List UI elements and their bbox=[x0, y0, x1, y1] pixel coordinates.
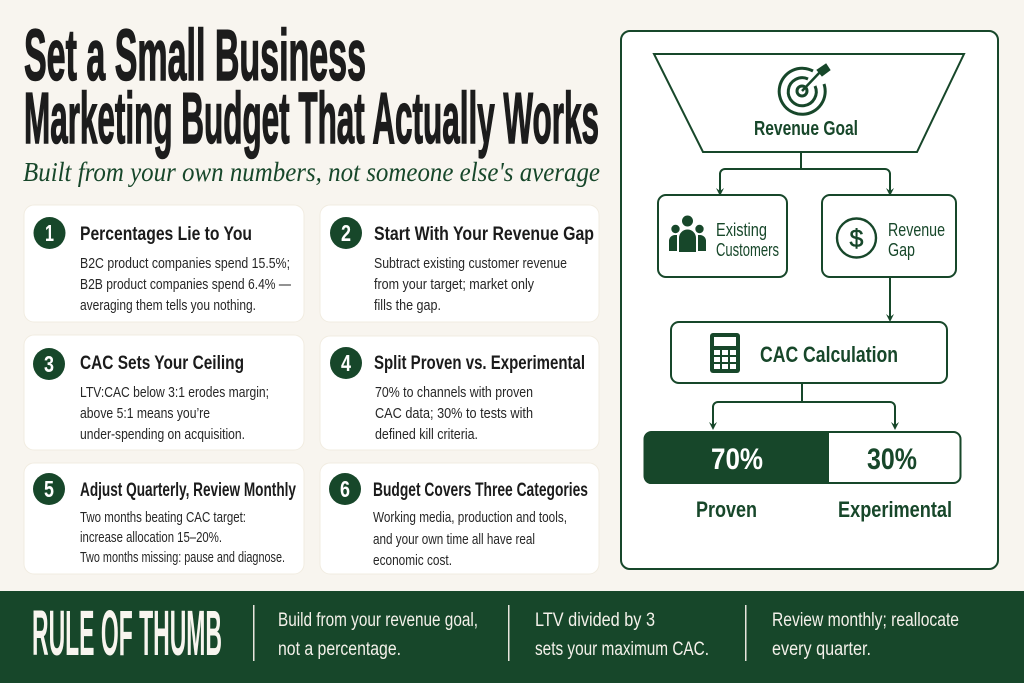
bar: 70/30 split bbox=[644, 432, 960, 484]
panel: card 6: 6 bbox=[340, 476, 350, 502]
panel: flow diagram bbox=[621, 31, 998, 569]
panel: card 6: Working media, production and tools, bbox=[373, 510, 567, 526]
panel: card 3: under-spending on acquisition. bbox=[80, 427, 245, 443]
panel: card 2: 2 bbox=[341, 220, 351, 246]
panel: card 6 bbox=[320, 463, 599, 574]
panel: card 2: from your target; market only bbox=[374, 277, 535, 293]
panel: card 4: 70% to channels with proven bbox=[375, 385, 533, 401]
text: tip 3 bbox=[772, 610, 959, 660]
panel: card 1: B2B product companies spend 6.4% — bbox=[80, 277, 291, 293]
text: tip 3: Review monthly; reallocate bbox=[772, 610, 959, 631]
panel: card 1: 1 bbox=[45, 220, 54, 246]
panel: card 5: 5 bbox=[44, 476, 54, 502]
bar: 70/30 split: 70% bbox=[711, 443, 763, 476]
bar: 70/30 split: 30% bbox=[867, 443, 917, 476]
panel: card 6: economic cost. bbox=[373, 553, 452, 569]
text: tip 2 bbox=[535, 610, 709, 660]
box: CAC calculation bbox=[671, 322, 947, 383]
panel: card 1 bbox=[24, 205, 304, 322]
panel: card 1: B2C product companies spend 15.5%; bbox=[80, 256, 290, 272]
panel: card 5 bbox=[24, 463, 304, 574]
box: existing customers: Customers bbox=[716, 240, 779, 260]
box: revenue gap bbox=[822, 195, 956, 277]
text: tip 1: not a percentage. bbox=[278, 639, 401, 660]
panel: card 4: defined kill criteria. bbox=[375, 427, 478, 443]
panel: card 2: Start With Your Revenue Gap bbox=[374, 224, 594, 245]
text: tip 1: Build from your revenue goal, bbox=[278, 610, 478, 631]
box: CAC calculation: CAC Calculation bbox=[760, 342, 898, 367]
panel: card 3: above 5:1 means you’re bbox=[80, 406, 210, 422]
panel: card 5: Adjust Quarterly, Review Monthly bbox=[80, 480, 296, 501]
panel: card 6: and your own time all have real bbox=[373, 532, 535, 548]
panel: rule of thumb banner: RULE OF THUMB bbox=[32, 597, 222, 669]
panel: card 3: LTV:CAC below 3:1 erodes margin; bbox=[80, 385, 269, 401]
panel: card 4: 4 bbox=[341, 350, 351, 376]
text: tip 1 bbox=[278, 610, 478, 660]
panel: card 5: Two months beating CAC target: bbox=[80, 510, 246, 526]
panel: card 2 bbox=[320, 205, 599, 322]
panel: card 2: fills the gap. bbox=[374, 298, 441, 314]
arrow: gap to CAC bbox=[886, 277, 894, 322]
panel: card 1: averaging them tells you nothing. bbox=[80, 298, 256, 314]
text: tip 3: every quarter. bbox=[772, 639, 871, 660]
box: existing customers: Existing bbox=[716, 220, 767, 240]
panel: card 4 bbox=[320, 336, 599, 450]
panel: card 4: CAC data; 30% to tests with bbox=[375, 406, 533, 422]
icon: target bbox=[779, 64, 830, 114]
arrow: CAC to split bbox=[709, 383, 899, 430]
icon: calculator bbox=[710, 333, 740, 373]
box: revenue gap: Gap bbox=[888, 240, 915, 260]
panel: card 5: increase allocation 15–20%. bbox=[80, 530, 222, 546]
panel: card 3: 3 bbox=[44, 351, 54, 377]
text: tip 2: LTV divided by 3 bbox=[535, 610, 655, 631]
subtitle: Built from your own numbers, not someone else's average bbox=[23, 157, 600, 187]
funnel: revenue goal: Revenue Goal bbox=[754, 118, 858, 140]
panel: card 3 bbox=[24, 335, 304, 450]
text: tip 2: sets your maximum CAC. bbox=[535, 639, 709, 660]
label: proven: Proven bbox=[696, 497, 757, 522]
label: experimental: Experimental bbox=[838, 497, 952, 522]
title: Set a Small Business bbox=[24, 16, 366, 96]
box: existing customers bbox=[658, 195, 787, 277]
arrow: goal to two boxes bbox=[716, 152, 894, 196]
title bbox=[24, 16, 599, 159]
panel: card 6: Budget Covers Three Categories bbox=[373, 480, 588, 501]
funnel: revenue goal bbox=[654, 54, 964, 152]
icon: people bbox=[669, 216, 706, 252]
panel: card 3: CAC Sets Your Ceiling bbox=[80, 353, 244, 374]
panel: card 4: Split Proven vs. Experimental bbox=[374, 353, 585, 374]
panel: card 5: Two months missing: pause and diagnose. bbox=[80, 550, 285, 566]
panel: card 2: Subtract existing customer revenue bbox=[374, 256, 567, 272]
panel: rule of thumb banner bbox=[0, 591, 1024, 683]
box: revenue gap: Revenue bbox=[888, 220, 945, 240]
panel: card 1: Percentages Lie to You bbox=[80, 224, 252, 245]
icon: dollar: $ bbox=[850, 225, 864, 253]
